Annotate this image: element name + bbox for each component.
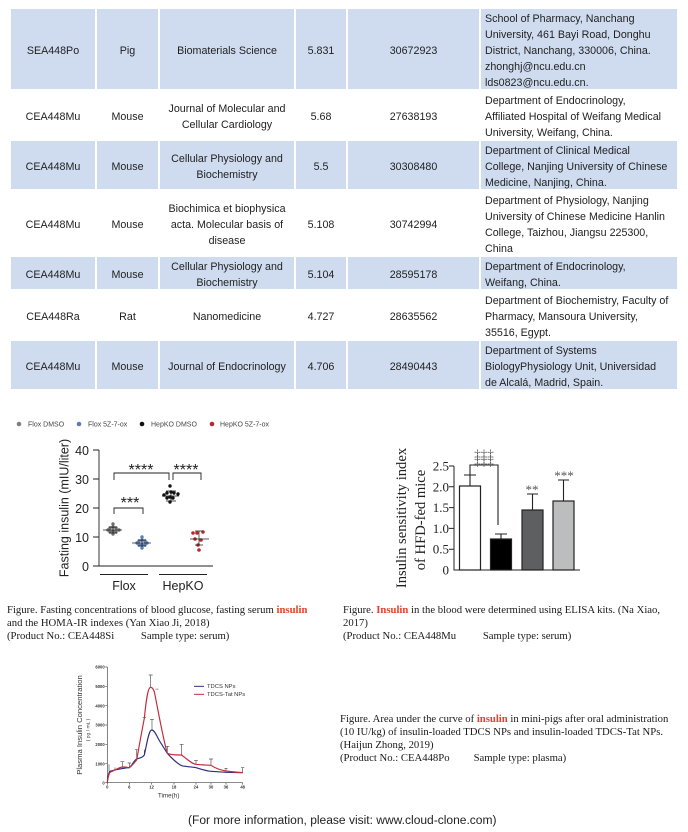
significance marks: ‡‡‡ [474, 446, 494, 461]
caption: fasting insulin figure: and the HOMA-IR indexes (Yan Xiao Ji, 2018) [7, 617, 210, 629]
table row: Cellular Physiology 5.5: 30308480 [390, 161, 437, 173]
table row: Biochimica et biophysica acta: disease [209, 235, 245, 247]
caption: fasting insulin figure: (Product No.: CEA448Si Sample type: serum) [7, 630, 229, 642]
table row: Biochimica et biophysica acta: Biochimica et biophysica [168, 203, 286, 215]
axis labels: 3000 [95, 723, 105, 728]
axis labels: 40 [75, 444, 89, 458]
table row: Journal of Endocrinology: Mouse [111, 361, 144, 373]
axes [449, 466, 580, 570]
table row: Nanomedicine [26, 295, 668, 339]
table row: Nanomedicine: Pharmacy, Mansoura University, [485, 311, 638, 323]
table row: Cellular Physiology 5.5: Biochemistry [196, 169, 258, 181]
table row: Journal of Endocrinology: Department of Systems [485, 345, 597, 357]
footer: website note: (For more information, please visit: www.cloud-clone.com) [188, 813, 497, 827]
caption: plasma insulin figure: (10 IU/kg) of insulin-loaded TDCS NPs and insulin-loaded TDCS-Tat NPs. [340, 726, 663, 738]
chart: plasma insulin concentration line chart: 12 [149, 785, 155, 790]
axis labels: 10 [75, 531, 89, 545]
axis labels: 20 [75, 502, 89, 516]
table row: Cellular Physiology 5.5: Mouse [111, 161, 144, 173]
significance stars: *** [121, 495, 139, 512]
caption: fasting insulin figure: Figure. Fasting concentrations of blood glucose, fasting serum insulin [7, 604, 307, 616]
table row: Biochimica et biophysica acta: CEA448Mu [26, 219, 80, 231]
table row: Cellular Physiology 5.104: Biochemistry [196, 277, 258, 289]
axis labels: 1.0 [433, 521, 449, 536]
table row: Nanomedicine: 28635562 [390, 311, 437, 323]
table row: Cellular Physiology 5.104: Mouse [111, 269, 144, 281]
table row: Nanomedicine: Department of Biochemistry, Faculty of [485, 295, 668, 307]
chart: plasma insulin concentration line chart: Plasma Insulin Concentration [75, 675, 84, 775]
table row: Nanomedicine: 35516, Egypt. [485, 327, 551, 339]
caption: plasma insulin figure: (Haijun Zhong, 2019) [340, 739, 434, 751]
legend: HepKO 5Z-7-ox [220, 422, 270, 428]
axis labels [58, 439, 204, 593]
caption: plasma insulin figure: Figure. Area under the curve of insulin in mini-pigs after oral administration [340, 713, 668, 725]
table row: Cellular Physiology 5.104: Department of Endocrinology, [485, 261, 626, 273]
table row: Cellular Physiology 5.5: Department of Clinical Medical [485, 145, 630, 157]
table row: Biochimica et biophysica acta: 5.108 [308, 219, 334, 231]
caption: plasma insulin figure [340, 713, 668, 764]
table row: Journal of Molecular and Cellular Cardiology: Journal of Molecular and [168, 103, 286, 115]
significance marks: *** [554, 468, 574, 483]
table row: Cellular Physiology 5.104: Cellular Physiology and [171, 261, 283, 273]
table row: Cellular Physiology 5.104: 5.104 [308, 269, 334, 281]
table row: Biochimica et biophysica acta: College, Taizhou, Jiangsu 225300, [485, 227, 648, 239]
error bars [109, 675, 244, 773]
significance stars [121, 462, 198, 512]
axis labels: 1.5 [433, 500, 449, 515]
axis labels: Flox [112, 579, 137, 593]
table row: Journal of Molecular and Cellular Cardiology: Affiliated Hospital of Weifang Medical [485, 111, 661, 123]
table row: SEA448Po: Pig [120, 45, 135, 57]
table row: SEA448Po: 30672923 [390, 45, 437, 57]
table row: Nanomedicine: 4.727 [308, 311, 334, 323]
chart: insulin sensitivity bar chart: of HFD-fed mice [413, 470, 429, 570]
table row: Biochimica et biophysica acta: Department of Physiology, Nanjing [485, 195, 649, 207]
table row: Journal of Endocrinology: 4.706 [308, 361, 334, 373]
axis labels: 6000 [95, 665, 105, 670]
data: Flox 5Z-7-ox [132, 535, 151, 550]
axes [105, 667, 243, 785]
table row: SEA448Po: lds0823@ncu.edu.cn. [485, 77, 589, 89]
legend: Flox DMSO [28, 422, 65, 428]
axes [93, 450, 213, 574]
table row: Journal of Endocrinology [11, 341, 677, 389]
error bars and bracket [464, 465, 569, 539]
chart: plasma insulin concentration line chart: 6 [128, 785, 131, 790]
table row: Journal of Molecular and Cellular Cardiology: 27638193 [390, 111, 437, 123]
axis labels: 4000 [95, 703, 105, 708]
table row: Cellular Physiology 5.104: 28595178 [390, 269, 437, 281]
axis labels: 2.5 [433, 458, 449, 474]
table row: Journal of Molecular and Cellular Cardiology: Department of Endocrinology, [485, 95, 626, 107]
significance marks: ‡‡‡ [474, 453, 494, 468]
caption: insulin sensitivity figure: (Product No.: CEA448Mu Sample type: serum) [343, 630, 571, 642]
axis labels: 1000 [95, 761, 105, 766]
axis labels: 0 [102, 780, 105, 785]
table row: SEA448Po: Biomaterials Science [177, 45, 277, 57]
table row: Cellular Physiology 5.104: Weifang, China. [485, 277, 561, 289]
table row: Journal of Endocrinology: 28490443 [390, 361, 437, 373]
table row: Journal of Endocrinology: CEA448Mu [26, 361, 80, 373]
axis labels [433, 458, 449, 578]
table row: Cellular Physiology 5.5: CEA448Mu [26, 161, 80, 173]
axis labels: 30 [75, 473, 89, 487]
table row: SEA448Po: zhonghj@ncu.edu.cn [485, 61, 586, 73]
table row: Biochimica et biophysica acta: acta. Molecular basis of [171, 219, 283, 231]
line: TDCS NPs [107, 730, 243, 783]
table row: Journal of Endocrinology: de Alcalá, Madrid, Spain. [485, 377, 603, 389]
table row: SEA448Po: School of Pharmacy, Nanchang [485, 13, 635, 25]
table row: Journal of Molecular and Cellular Cardiology: Cellular Cardiology [182, 119, 272, 131]
table row: Journal of Molecular and Cellular Cardiology: Mouse [111, 111, 144, 123]
axis labels: 0 [442, 562, 449, 578]
data: Flox DMSO [103, 522, 122, 536]
chart: plasma insulin concentration line chart: 24 [194, 785, 199, 790]
caption: plasma insulin figure: (Product No.: CEA448Po Sample type: plasma) [340, 752, 566, 764]
table row: SEA448Po: 5.831 [308, 45, 334, 57]
legend: TDCS-Tat NPs [207, 692, 245, 698]
axis labels [95, 665, 105, 785]
table row: Biochimica et biophysica acta [26, 195, 665, 255]
line: TDCS-Tat NPs [107, 687, 243, 783]
significance marks: ** [526, 482, 538, 497]
table row: Nanomedicine: Nanomedicine [193, 311, 261, 323]
table row: SEA448Po: District, Nanchang, 330006, China. [485, 45, 651, 57]
table row: Journal of Molecular and Cellular Cardiology [26, 95, 661, 139]
legend: Flox 5Z-7-ox [88, 422, 128, 428]
table row: Journal of Molecular and Cellular Cardiology: 5.68 [311, 111, 331, 123]
table row: Journal of Molecular and Cellular Cardiology: CEA448Mu [26, 111, 80, 123]
legend [17, 422, 270, 428]
caption: insulin sensitivity figure [343, 604, 660, 642]
table row: SEA448Po: University, 461 Bayi Road, Donghu [485, 29, 651, 41]
table of citations [11, 9, 677, 389]
axis labels: Fasting insulin (mIU/liter) [58, 439, 72, 577]
chart: insulin sensitivity bar chart: Insulin sensitivity index [394, 447, 410, 588]
caption: fasting insulin figure [7, 604, 308, 642]
significance stars: **** [129, 462, 153, 479]
table row: Cellular Physiology 5.5: 5.5 [314, 161, 328, 173]
table row: Cellular Physiology 5.104: CEA448Mu [26, 269, 80, 281]
chart: plasma insulin concentration line chart: ( pg / mL ) [85, 718, 91, 741]
significance stars: **** [174, 462, 198, 479]
significance marks: ** [155, 687, 159, 692]
caption: insulin sensitivity figure: Figure. Insulin in the blood were determined using ELISA kits. (Na Xiao, [343, 604, 660, 616]
table row: Cellular Physiology 5.5: Medicine, Nanjing, China. [485, 177, 607, 189]
table row: Biochimica et biophysica acta: Mouse [111, 219, 144, 231]
axis labels: 0.5 [433, 542, 449, 557]
table row: Biochimica et biophysica acta: China [485, 243, 513, 255]
table row: Biochimica et biophysica acta: University of Chinese Medicine Hanlin [485, 211, 665, 223]
data: HepKO DMSO [162, 484, 180, 504]
legend: TDCS NPs [207, 684, 236, 690]
axis labels: 2.0 [433, 479, 449, 494]
significance marks [474, 446, 574, 497]
axis labels: 2000 [95, 742, 105, 747]
axis labels: 5000 [95, 684, 105, 689]
axis labels: 0 [82, 560, 89, 574]
chart: plasma insulin concentration line chart: 48 [240, 785, 246, 790]
chart: plasma insulin concentration line chart: 30 [209, 785, 214, 790]
table row: Cellular Physiology 5.5: College, Nanjing University of Chinese [485, 161, 667, 173]
chart: plasma insulin concentration line chart: 0 [106, 785, 109, 790]
caption: insulin sensitivity figure: 2017) [343, 617, 368, 629]
legend [194, 684, 245, 698]
table row: Cellular Physiology 5.5 [11, 141, 677, 189]
bars [460, 486, 574, 570]
table row: Cellular Physiology 5.5: Cellular Physiology and [171, 153, 283, 165]
chart: plasma insulin concentration line chart: 36 [224, 785, 229, 790]
table row: SEA448Po: SEA448Po [27, 45, 79, 57]
legend: HepKO DMSO [151, 422, 197, 428]
table row: Nanomedicine: CEA448Ra [26, 311, 80, 323]
table row: Journal of Endocrinology: Journal of Endocrinology [168, 361, 286, 373]
table row: SEA448Po [11, 9, 677, 89]
data: HepKO 5Z-7-ox [190, 530, 209, 552]
table row: Nanomedicine: Rat [119, 311, 136, 323]
chart: plasma insulin concentration line chart: 18 [172, 785, 177, 790]
axis labels: HepKO [162, 579, 204, 593]
table row: Biochimica et biophysica acta: 30742994 [390, 219, 437, 231]
table row: Cellular Physiology 5.104 [11, 257, 677, 289]
table row: Journal of Endocrinology: BiologyPhysiology Unit, Universidad [485, 361, 656, 373]
chart: plasma insulin concentration line chart: Time(h) [158, 793, 179, 800]
table row: Journal of Molecular and Cellular Cardiology: University, Weifang, China. [485, 127, 613, 139]
